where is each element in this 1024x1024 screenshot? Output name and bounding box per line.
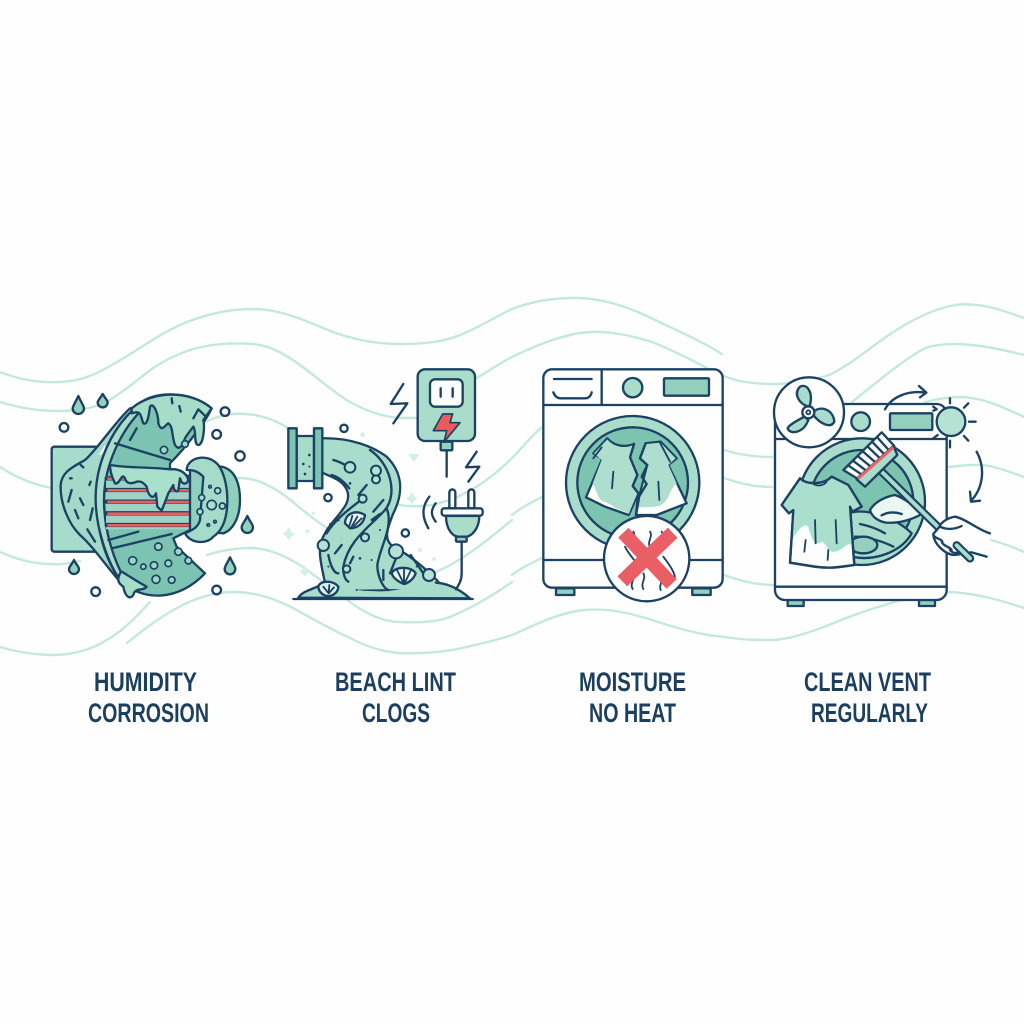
label: moisture no heat (579, 667, 686, 728)
panel: beach lint clogs icon (283, 369, 483, 599)
circulation arrows (885, 386, 982, 502)
outlet duct flange (185, 458, 227, 542)
vent pipe flanges (288, 428, 322, 488)
sun dial (937, 398, 976, 447)
label: moisture no heat: NO HEAT (589, 698, 676, 728)
seashell three (318, 582, 338, 596)
lint specks (327, 482, 418, 591)
label: beach lint clogs (335, 667, 456, 728)
back mounting plate (52, 447, 98, 552)
slime dripping from top of drum (132, 395, 212, 448)
display (664, 378, 709, 396)
panel: humidity corrosion icon (52, 394, 253, 597)
label: beach lint clogs: BEACH LINT (335, 667, 456, 697)
laundry in drum (848, 495, 922, 558)
torn wet shirt (586, 438, 687, 515)
washer panel lines (775, 439, 947, 587)
corroded drum disc (97, 394, 212, 596)
label: beach lint clogs: CLOGS (362, 698, 430, 728)
washer body (543, 369, 723, 588)
no heat badge (604, 516, 689, 601)
funnel surface marks (68, 445, 108, 542)
lint bubbles (318, 462, 435, 581)
power plug (442, 489, 483, 589)
lint pile base (298, 583, 470, 598)
funnel housing (61, 407, 145, 583)
vibration arcs (423, 497, 436, 528)
stained t-shirt (782, 477, 862, 568)
lightning bolts (391, 384, 479, 482)
label: humidity corrosion: HUMIDITY (94, 667, 197, 697)
wall outlet (418, 369, 475, 477)
faint lint specks (283, 432, 436, 577)
water drops (69, 394, 253, 574)
ground line (293, 595, 473, 602)
panel: moisture no heat icon (543, 369, 723, 601)
cleaning brush (843, 432, 970, 558)
rust bubbles on lower drum (129, 441, 192, 583)
twisted lint stream fill (320, 438, 438, 590)
label: humidity corrosion (88, 667, 209, 728)
corrosion cluster inside duct (197, 485, 225, 526)
seashell one (345, 512, 365, 528)
control panel lines (543, 370, 723, 560)
panel: clean vent regularly icon (774, 377, 990, 606)
fan badge (774, 377, 844, 447)
drum door (798, 438, 925, 565)
drum sector lines (108, 428, 172, 548)
door (566, 416, 699, 549)
washer feet (788, 600, 935, 606)
drum rim band (96, 405, 145, 583)
control knob (623, 378, 642, 397)
display (890, 413, 932, 430)
slime dripping over element (110, 465, 188, 511)
lint strand lines (327, 450, 423, 590)
knob (851, 412, 870, 431)
heating element stripes (106, 476, 191, 529)
label: clean vent regularly: REGULARLY (811, 698, 928, 728)
outlet duct back (190, 467, 240, 533)
slime at lower rim (118, 572, 147, 597)
label: clean vent regularly: CLEAN VENT (804, 667, 931, 697)
label: humidity corrosion: CORROSION (88, 698, 209, 728)
label: moisture no heat: MOISTURE (579, 667, 686, 697)
label: clean vent regularly (804, 667, 931, 728)
seashell two (392, 568, 416, 584)
hand holding brush (933, 517, 990, 558)
twisted lint stream outline (320, 438, 438, 583)
washer body (775, 404, 947, 600)
washer feet (556, 588, 711, 595)
stray rings (324, 425, 409, 537)
floating rust rings (60, 407, 245, 596)
